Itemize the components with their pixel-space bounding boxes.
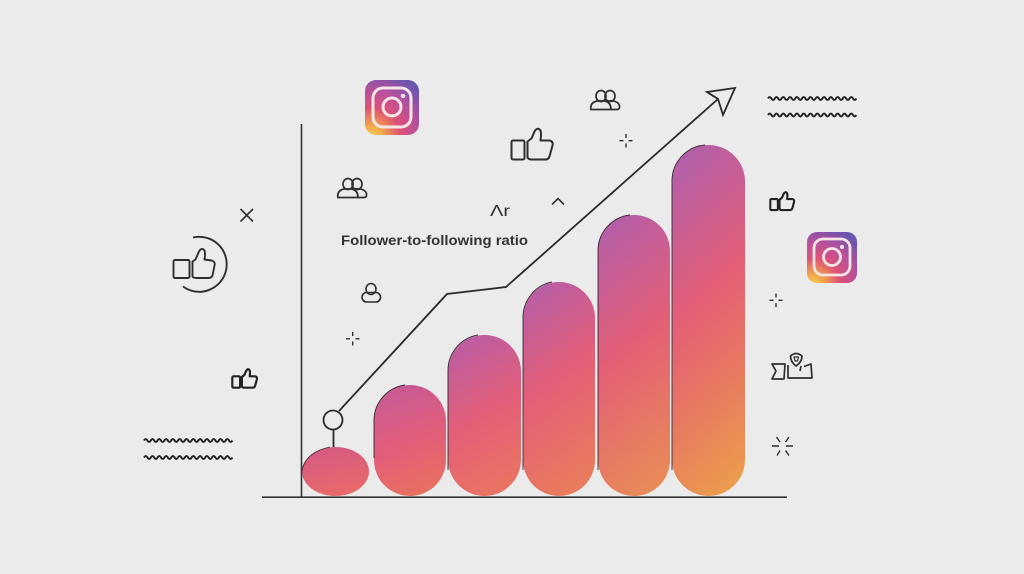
bar 4 [523,282,595,496]
icon: people top [591,90,620,110]
garbled label: Λr [490,203,511,220]
icon: instagram logo small [807,232,857,283]
growth trend arrow [324,88,735,447]
icon: single person [362,284,380,302]
chart label: Follower-to-following ratio [341,233,528,248]
bar 5 [598,215,670,496]
bar 2 [374,385,446,496]
icon: thumbs up top [512,129,553,160]
icon: thumbs up right [770,192,794,210]
icon: thumbs up left [232,369,257,388]
icon: instagram logo large [365,80,419,135]
icon: sparkle left [346,332,360,346]
icon: thumbs up in circle [174,237,227,292]
bar chart [302,145,745,496]
icon: sparkle top [620,134,632,148]
bar 6 [672,145,745,496]
icon: burst [772,437,793,456]
icon: sparkle right [770,294,782,307]
bar 1 (oval) [302,447,369,496]
wavy text lines top right [768,97,856,116]
icon: cross [240,209,253,222]
chart axes [262,124,787,497]
bar 3 [448,335,521,496]
icon: people left [338,178,367,198]
wavy text lines bottom left [144,439,232,459]
icon: caret [552,198,564,204]
icon: badge and ribbon [772,354,812,379]
